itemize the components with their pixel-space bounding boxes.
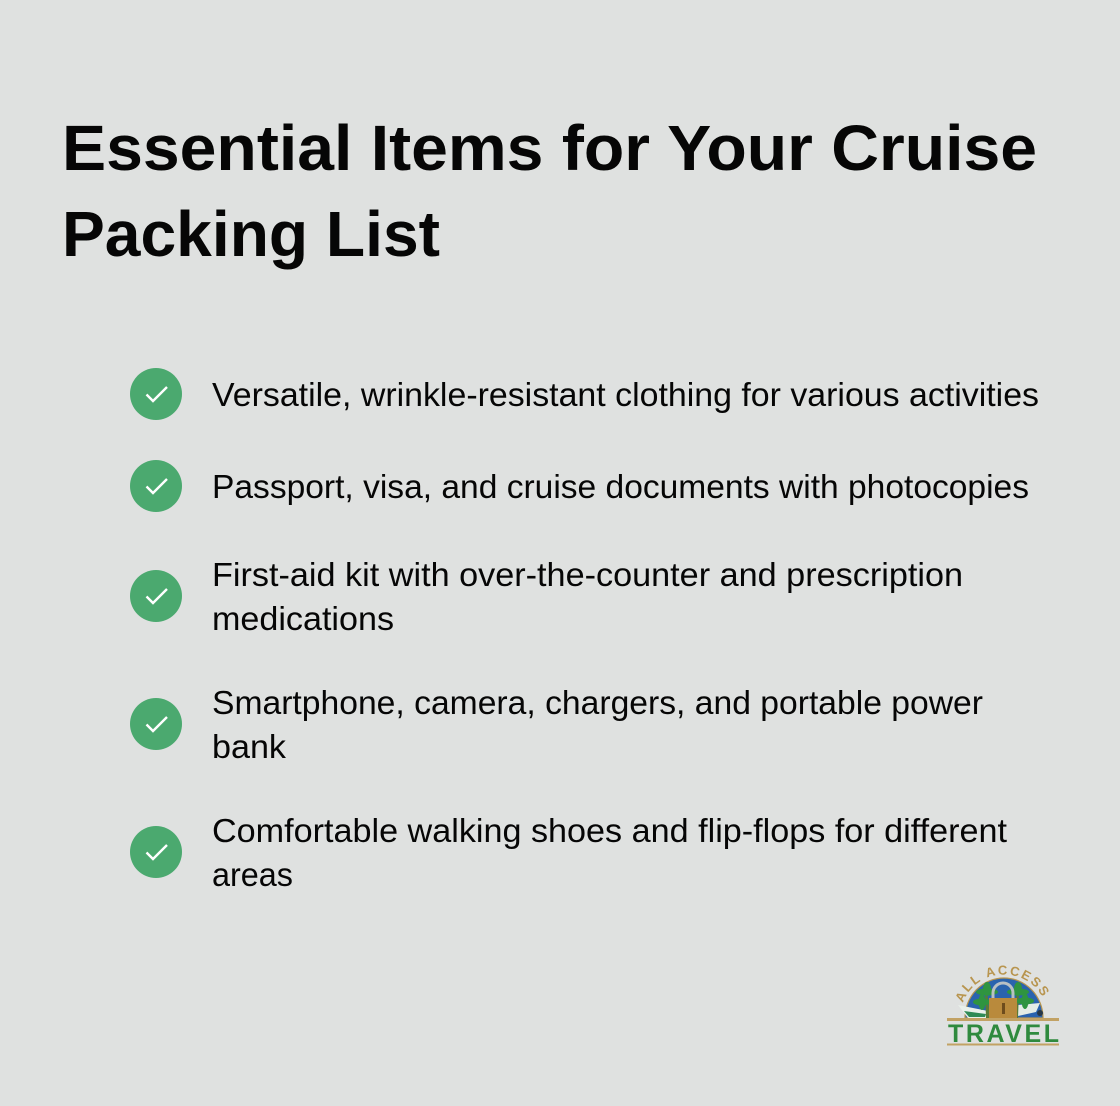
icon: check [130, 460, 182, 512]
item: shoes [130, 812, 1007, 893]
item: first aid [130, 556, 963, 637]
logo arc text: ALL ACCESS [956, 966, 1048, 1002]
title: Packing List [62, 198, 440, 270]
title [62, 112, 1037, 270]
item text [212, 684, 983, 765]
logo: All Access Travel [947, 966, 1059, 1048]
item text: areas [212, 856, 293, 893]
item text: Passport, visa, and cruise documents with photocopies [212, 468, 1029, 505]
logo arch [965, 978, 1043, 1018]
item text: Smartphone, camera, chargers, and portable power [212, 684, 983, 721]
item: documents [130, 460, 1029, 512]
item text: medications [212, 600, 394, 637]
icon: check [130, 368, 182, 420]
logo boats [958, 1003, 1043, 1018]
item text: First-aid kit with over-the-counter and prescription [212, 556, 963, 593]
icon: check [130, 826, 182, 878]
checklist [130, 368, 1039, 893]
logo palms [973, 982, 1034, 1018]
icon: check [130, 570, 182, 622]
icon: check [130, 698, 182, 750]
item: clothing [130, 368, 1039, 420]
item text: Comfortable walking shoes and flip-flops for different [212, 812, 1007, 849]
item text [212, 812, 1007, 893]
item text: bank [212, 728, 287, 765]
logo padlock [989, 983, 1017, 1018]
logo wordmark: TRAVEL [948, 1020, 1059, 1048]
logo bars [947, 1018, 1059, 1046]
item text [212, 556, 963, 637]
title: Essential Items for Your Cruise [62, 112, 1037, 184]
item: electronics [130, 684, 983, 765]
item text: Versatile, wrinkle-resistant clothing for various activities [212, 376, 1039, 413]
